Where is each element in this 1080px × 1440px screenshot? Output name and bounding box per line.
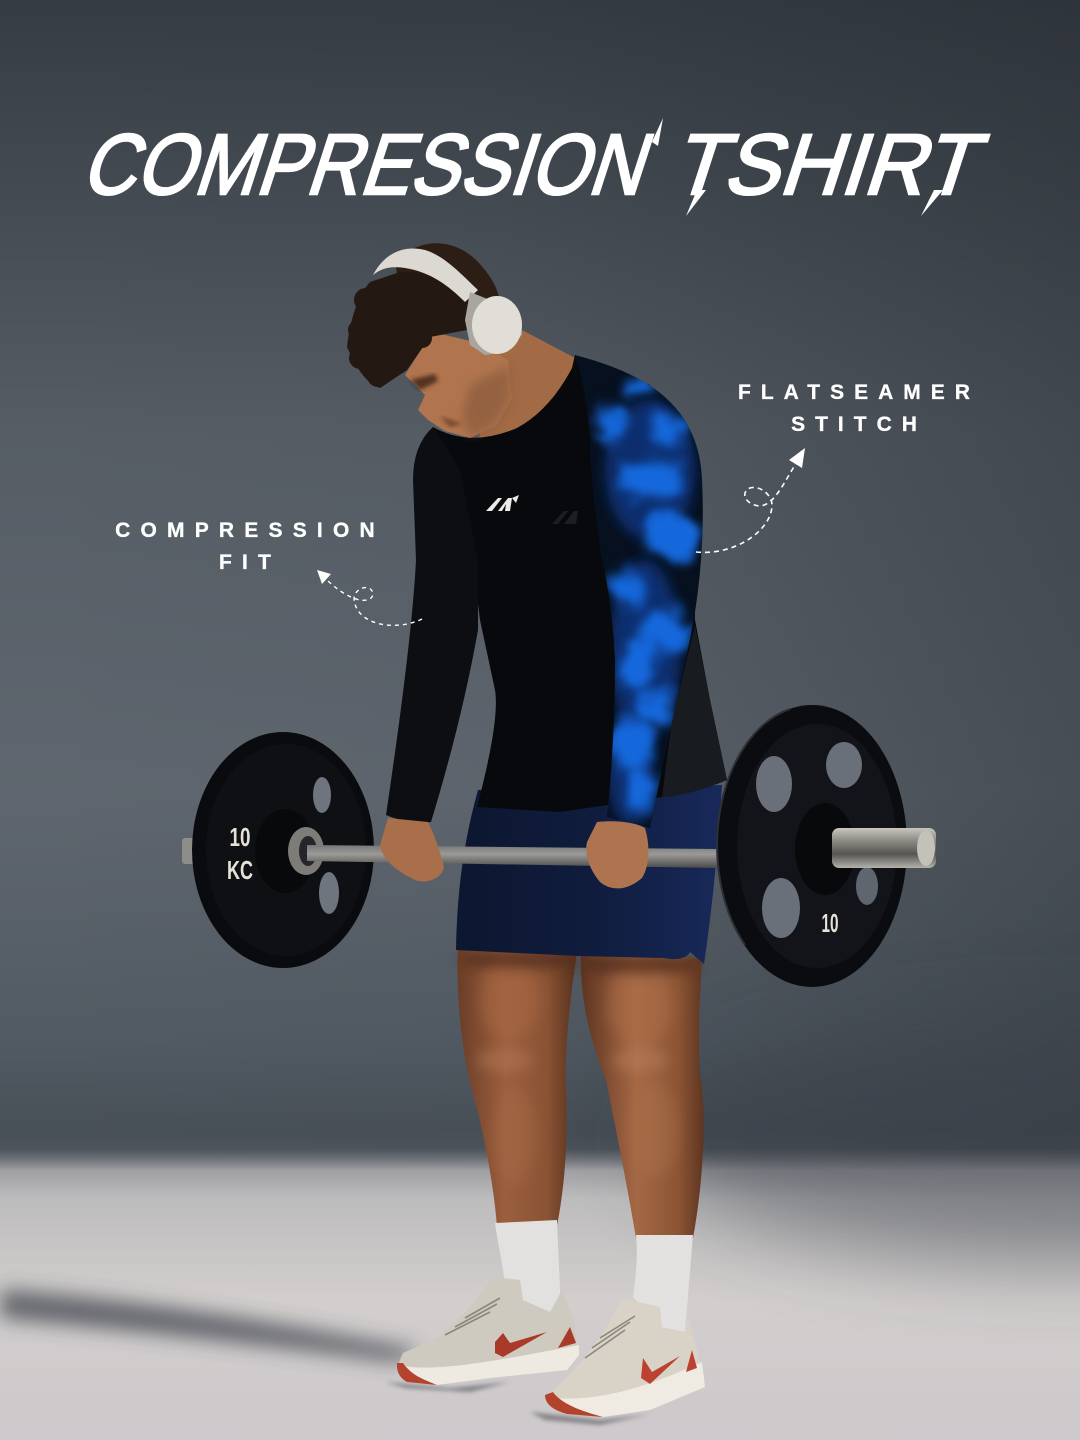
barbell (182, 705, 936, 987)
arrow: flatseamer stitch (696, 448, 805, 552)
right plate weight label: 10 (822, 908, 838, 938)
left shoe (397, 1277, 579, 1385)
socks (495, 1220, 693, 1332)
floor shadow (0, 1290, 420, 1362)
leg muscle shading (460, 950, 700, 1185)
shirt logo white (486, 495, 519, 511)
left plate weight label: 10 (230, 822, 250, 852)
title: COMPRESSION (74, 116, 665, 213)
sleeve tie-dye pattern (598, 375, 701, 825)
studio floor (0, 1130, 1080, 1440)
torso shirt (433, 355, 727, 812)
headphone ear cup (465, 292, 522, 355)
right hand (586, 821, 648, 888)
title: TSHIRT (664, 116, 997, 213)
face (405, 332, 512, 438)
right shoe (545, 1298, 705, 1417)
shirt logo dark (552, 511, 578, 524)
arrow: compression fit (317, 570, 422, 625)
left arm sleeve (386, 427, 478, 823)
left hand (380, 818, 444, 882)
left leg (458, 948, 577, 1226)
left plate (192, 732, 374, 968)
label: flatseamer stitch (738, 381, 980, 436)
bar shaft (307, 845, 717, 868)
label: compression fit: COMPRESSION (115, 519, 385, 542)
label: compression fit: FIT (219, 551, 281, 574)
tie-dye sleeve (575, 355, 703, 828)
face shading (410, 365, 510, 437)
sleeve end of bar (832, 828, 936, 868)
athlete figure (347, 243, 727, 1417)
shoe contact shadows (385, 1382, 650, 1425)
label: compression fit (115, 519, 385, 574)
hair back (395, 243, 499, 320)
lower side panel (662, 625, 727, 797)
shorts (456, 785, 722, 964)
left bar stub (182, 838, 196, 864)
headphone band (373, 248, 478, 302)
hair (347, 272, 470, 388)
neck (478, 330, 575, 442)
right plate (717, 705, 936, 987)
left plate: KC (227, 855, 253, 885)
label: flatseamer stitch: FLATSEAMER (738, 381, 980, 404)
title brush accents (652, 118, 943, 216)
left plate hub (255, 809, 315, 893)
right leg (581, 955, 704, 1238)
label: flatseamer stitch: STITCH (791, 413, 927, 436)
